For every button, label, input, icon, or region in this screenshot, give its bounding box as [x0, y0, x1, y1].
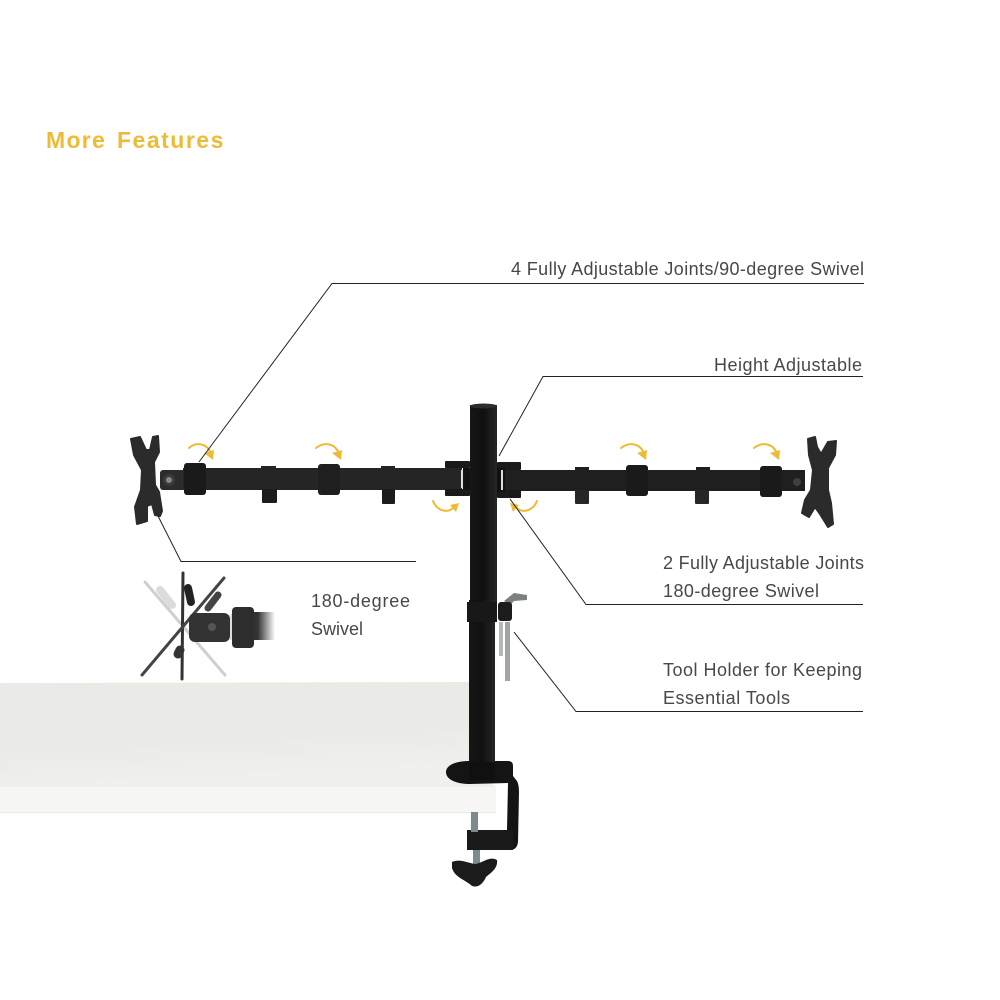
callout: 2 joints: 180-degree Swivel — [663, 581, 819, 601]
callout: 4 joints — [199, 259, 864, 462]
vertical post — [467, 404, 497, 780]
monitor mount — [131, 404, 836, 887]
right VESA bracket — [802, 437, 836, 527]
callout: 180 swivel: 180-degree — [311, 591, 410, 611]
clamp knob — [452, 859, 497, 887]
title: More — [46, 127, 106, 153]
desk clamp — [446, 761, 519, 850]
desk — [0, 682, 496, 813]
right arm — [497, 462, 805, 504]
callout: 4 joints: 4 Fully Adjustable Joints/90-degree Swivel — [511, 259, 864, 279]
callout: tool holder — [514, 632, 863, 712]
title: Features — [117, 127, 225, 153]
callout: tool holder: Essential Tools — [663, 688, 790, 708]
swivel detail image — [142, 573, 275, 679]
callout: height: Height Adjustable — [714, 355, 862, 375]
callout: 2 joints: 2 Fully Adjustable Joints — [663, 553, 864, 573]
callout: tool holder: Tool Holder for Keeping — [663, 660, 862, 680]
left arm — [160, 461, 470, 504]
clamp screw — [471, 812, 480, 864]
callout: 2 joints — [510, 499, 864, 604]
callout: 180 swivel: Swivel — [311, 619, 363, 639]
callout: height — [499, 355, 863, 456]
left VESA bracket — [131, 436, 162, 524]
callout: 180 swivel — [158, 516, 416, 639]
tool holder — [498, 593, 527, 681]
swivel arrows — [189, 444, 780, 512]
